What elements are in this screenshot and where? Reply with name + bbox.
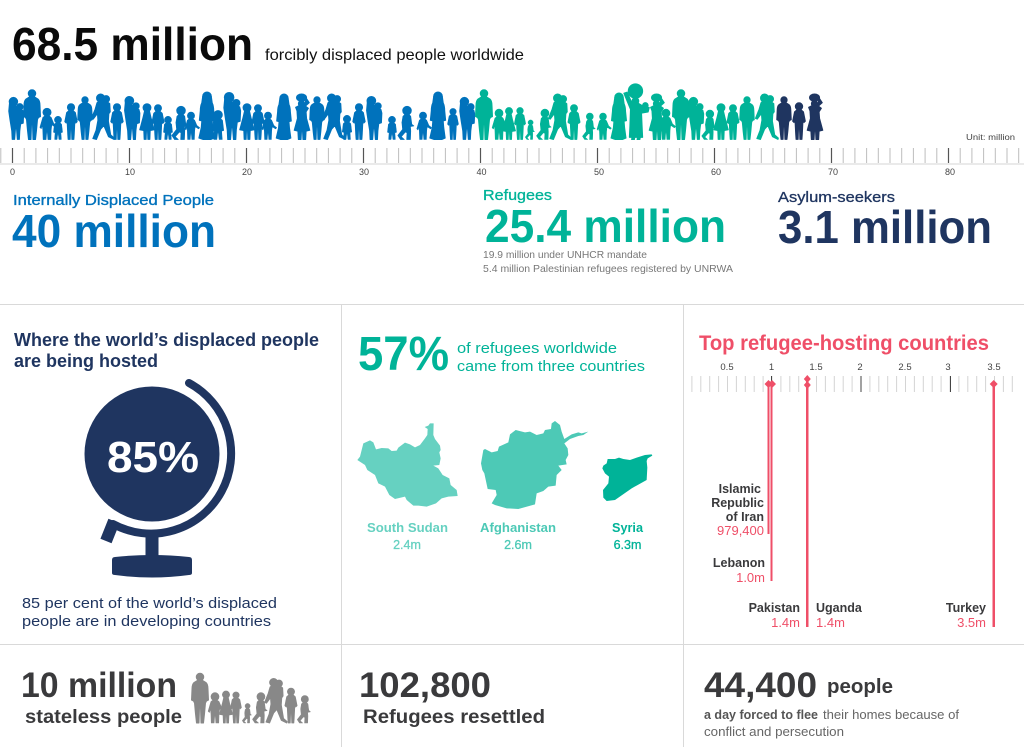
stat: asylum-seekers: Asylum-seekers xyxy=(778,189,895,206)
stat: refugees resettled xyxy=(359,666,545,728)
label: Uganda xyxy=(816,601,863,630)
panel grid lines xyxy=(0,304,1024,747)
stat: refugees resettled: 102,800 xyxy=(359,666,491,705)
scale: hosted refugees in millions: 1 xyxy=(769,362,774,373)
label: South Sudan xyxy=(367,521,448,552)
stat: internally displaced people: Internally Displaced People xyxy=(13,192,214,209)
stat: refugees: 5.4 million Palestinian refugees registered by UNRWA xyxy=(483,263,733,275)
marker lines xyxy=(764,375,998,627)
stat: people forced to flee per day: conflict and persecution xyxy=(704,724,844,739)
label: Syria: Syria xyxy=(612,521,644,535)
stat: stateless people: 10 million xyxy=(21,666,177,705)
stat: people forced to flee per day xyxy=(704,666,959,739)
ruler: millions scale: 30 xyxy=(359,167,369,177)
icon: globe with 85% xyxy=(84,383,231,578)
ruler: millions scale: 0 xyxy=(10,167,15,177)
unit label: Unit: million xyxy=(966,132,1015,142)
label: Afghanistan: 2.6m xyxy=(504,538,532,552)
heading: 57%: came from three countries xyxy=(457,358,645,375)
icon: globe with 85%: 85% xyxy=(107,433,199,482)
ruler: millions scale: 60 xyxy=(711,167,721,177)
label: Turkey: Turkey xyxy=(946,601,986,615)
heading: hosted xyxy=(14,330,319,371)
icon: stateless family silhouettes xyxy=(192,673,310,723)
stat: stateless people xyxy=(21,666,182,728)
label: Pakistan: Pakistan xyxy=(749,601,800,615)
stat: people forced to flee per day: 44,400 xyxy=(704,666,817,705)
label: Turkey xyxy=(946,601,986,630)
scale: hosted refugees in millions: 1.5 xyxy=(809,362,823,373)
scale: hosted refugees in millions: 0.5 xyxy=(720,362,734,373)
scale: hosted refugees in millions: 3 xyxy=(945,362,951,373)
scale: hosted refugees in millions: 2 xyxy=(857,362,863,373)
stat: people forced to flee per day: a day forced to flee xyxy=(704,707,818,722)
map: South Sudan xyxy=(357,423,458,507)
map: Afghanistan xyxy=(481,421,588,509)
scale: hosted refugees in millions xyxy=(691,362,1013,384)
label: Iran: Islamic xyxy=(719,482,761,496)
label: Lebanon xyxy=(713,556,765,585)
heading: 57%: 57% xyxy=(358,328,449,381)
heading: top hosting countries: Top refugee-hosting countries xyxy=(699,332,989,355)
label: Uganda: Uganda xyxy=(816,601,863,615)
title: total displaced xyxy=(12,18,524,70)
label: Afghanistan: Afghanistan xyxy=(480,521,556,535)
map: Syria xyxy=(602,454,652,501)
label: Iran xyxy=(711,482,764,538)
text: developing countries: people are in developing countries xyxy=(22,613,271,630)
stat: refugees: 25.4 million xyxy=(485,200,726,252)
label: Iran: of Iran xyxy=(726,510,764,524)
label: Turkey: 3.5m xyxy=(957,615,986,630)
stat: people forced to flee per day: their homes because of xyxy=(823,707,959,722)
ruler: millions scale: 10 xyxy=(125,167,135,177)
people silhouettes: refugees xyxy=(476,84,778,140)
label: Pakistan: 1.4m xyxy=(771,615,800,630)
panel: top refugee-hosting countries xyxy=(691,332,1013,630)
stat: refugees: Refugees xyxy=(483,188,552,204)
label: South Sudan: 2.4m xyxy=(393,538,421,552)
heading: hosted: Where the world’s displaced people xyxy=(14,330,319,350)
label: Afghanistan xyxy=(480,521,556,552)
label: Iran: 979,400 xyxy=(717,523,764,538)
label: Lebanon: 1.0m xyxy=(736,570,765,585)
panel: where displaced people are hosted xyxy=(14,330,319,630)
stat: internally displaced people: 40 million xyxy=(12,205,216,257)
ruler: millions scale xyxy=(0,156,1024,177)
stat: refugees xyxy=(483,188,733,275)
label: Syria xyxy=(612,521,644,552)
people silhouettes: internally displaced xyxy=(9,90,475,140)
stat: refugees resettled: Refugees resettled xyxy=(363,707,545,728)
ruler: millions scale: 40 xyxy=(476,167,487,177)
stat: refugees: 19.9 million under UNHCR mandate xyxy=(483,249,647,261)
label: South Sudan: South Sudan xyxy=(367,521,448,535)
ruler: millions scale: 20 xyxy=(242,167,252,177)
scale: hosted refugees in millions: 2.5 xyxy=(898,362,912,373)
ruler: millions scale: 70 xyxy=(828,167,838,177)
label: Syria: 6.3m xyxy=(614,538,641,552)
heading: 57%: of refugees worldwide xyxy=(457,340,617,357)
heading: 57% xyxy=(358,328,645,381)
people silhouettes: asylum-seekers xyxy=(777,94,823,140)
scale: hosted refugees in millions: 3.5 xyxy=(987,362,1001,373)
heading: hosted: are being hosted xyxy=(14,351,158,371)
title: total displaced: forcibly displaced people worldwide xyxy=(265,47,524,64)
text: developing countries xyxy=(22,595,277,630)
label: Iran: Republic xyxy=(711,496,764,510)
stat: stateless people: stateless people xyxy=(25,707,182,728)
text: developing countries: 85 per cent of the world’s displaced xyxy=(22,595,277,612)
label: Pakistan xyxy=(749,601,800,630)
title: total displaced: 68.5 million xyxy=(12,18,253,70)
ruler: millions scale: 50 xyxy=(594,167,604,177)
label: Lebanon: Lebanon xyxy=(713,556,765,570)
stat: asylum-seekers: 3.1 million xyxy=(778,201,992,253)
stat: people forced to flee per day: people xyxy=(827,676,893,698)
label: Uganda: 1.4m xyxy=(816,615,845,630)
panel: three source countries xyxy=(357,328,652,552)
ruler: millions scale: 80 xyxy=(945,167,955,177)
